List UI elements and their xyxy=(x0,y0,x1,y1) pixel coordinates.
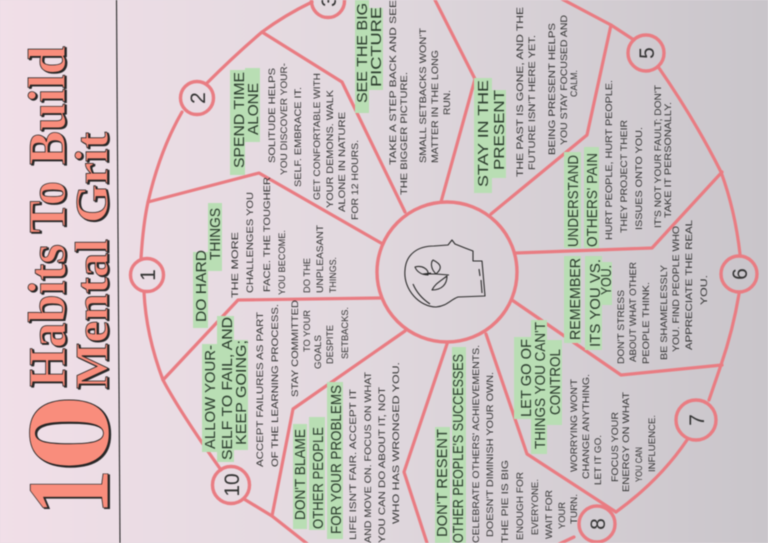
panel: habit 7 let go of things you can't control xyxy=(514,320,658,492)
panel: habit 10 allow yourself to fail: SETBACKS. xyxy=(340,307,351,359)
panel: habit 6 remember it's you vs you: DON'T STRESS xyxy=(616,290,627,364)
node 1 xyxy=(130,258,164,292)
panel: habit 6 remember it's you vs you: YOU. xyxy=(599,265,615,295)
panel: habit 7 let go of things you can't control: ENERGY ON WHAT xyxy=(621,392,632,492)
title: Habits xyxy=(20,245,78,388)
panel: habit 7 let go of things you can't control: LET GO OF xyxy=(519,339,535,417)
panel: habit 2 spend time alone: ALONE xyxy=(246,83,262,135)
panel: habit 9 don't blame other people: LIFE ISN'T FAIR. ACCEPT IT xyxy=(348,389,359,540)
panel: habit 4 stay in the present: CALM. xyxy=(569,70,580,97)
node 6: 6 xyxy=(729,268,752,280)
panel: habit 6 remember it's you vs you xyxy=(564,220,710,364)
panel: habit 3 see the big picture: SMALL SETBACKS WON'T xyxy=(418,28,429,163)
panel: habit 4 stay in the present: PRESENT xyxy=(492,90,508,170)
panel: habit 10 allow yourself to fail: OF THE LEARNING PROCESS. xyxy=(270,304,281,467)
panel: habit 8 don't resent other people's successes xyxy=(435,345,580,543)
panel: habit 2 spend time alone: YOU DISCOVER YOUR- xyxy=(279,63,290,175)
panel: habit 2 spend time alone: YOUR DEMONS. WALK xyxy=(325,89,336,208)
panel: habit 8 don't resent other people's successes: DON'T RESENT xyxy=(435,429,451,537)
title: 1 xyxy=(3,469,134,515)
title: 0 xyxy=(3,394,134,472)
panel: habit 7 let go of things you can't control: FOCUS YOUR xyxy=(610,412,621,482)
panel: habit 7 let go of things you can't control: CHANGE ANYTHING. xyxy=(581,374,592,479)
panel: habit 9 don't blame other people: DON'T BLAME xyxy=(293,429,309,520)
panel: habit 1 do hard things: THINGS xyxy=(208,208,224,260)
panel: habit 4 stay in the present: STAY IN THE xyxy=(476,80,492,187)
panel: habit 5 understand others' pain xyxy=(564,80,674,248)
panel: habit 2 spend time alone: SPEND TIME xyxy=(232,72,248,168)
panel: habit 3 see the big picture: THE BIGGER PICTURE. xyxy=(399,72,410,195)
title: Habits xyxy=(19,244,77,387)
panel: habit 10 allow yourself to fail: KEEP GOING; xyxy=(234,340,250,445)
panel: habit 5 understand others' pain: ISSUES ONTO YOU. xyxy=(634,127,645,230)
panel: habit 10 allow yourself to fail: ALLOW YOUR- xyxy=(203,345,219,449)
panel: habit 3 see the big picture: PICTURE xyxy=(369,7,385,87)
node 1: 1 xyxy=(137,269,160,281)
panel: habit 7 let go of things you can't control: INFLUENCE. xyxy=(647,415,658,472)
panel: habit 8 don't resent other people's successes: WAIT FOR xyxy=(544,490,555,539)
panel: habit 1 do hard things: DO THE xyxy=(302,258,313,293)
icon: head with sprout xyxy=(405,240,485,307)
title: 0 xyxy=(4,395,136,473)
title: 1 xyxy=(4,470,136,516)
panel: habit 10 allow yourself to fail xyxy=(202,300,351,467)
panel: habit 1 do hard things xyxy=(193,177,339,328)
panel: habit 3 see the big picture: MATTER IN THE LONG xyxy=(430,50,441,163)
node 6 xyxy=(721,256,757,292)
title xyxy=(3,46,136,516)
panel: habit 8 don't resent other people's successes: EVERYONE. xyxy=(530,479,541,535)
panel: habit 5 understand others' pain: IT'S NOT YOUR FAULT; DON'T xyxy=(653,85,664,228)
panel: habit 5 understand others' pain: TAKE IT PERSONALLY. xyxy=(663,102,674,218)
panel: habit 4 stay in the present: BEING PRESENT HELPS xyxy=(547,23,558,155)
panel: habit 2 spend time alone xyxy=(230,63,361,220)
panel: habit 2 spend time alone: ALONE IN NATURE xyxy=(337,112,348,212)
node 7 xyxy=(676,400,716,440)
panel: habit 5 understand others' pain: OTHERS' PAIN xyxy=(585,153,601,247)
node 2: 2 xyxy=(187,92,210,104)
panel: habit 3 see the big picture: TAKE A STEP BACK AND SEE xyxy=(388,0,399,165)
panel: habit 9 don't blame other people: WHO HAS WRONGED YOU. xyxy=(391,362,402,524)
panel: habit 8 don't resent other people's successes: OTHER PEOPLE'S SUCCESSES xyxy=(451,354,467,543)
title: Grit xyxy=(66,132,118,223)
panel: habit 1 do hard things: YOU BECOME. xyxy=(277,230,288,295)
title: Mental xyxy=(68,240,120,390)
panel: habit 6 remember it's you vs you: APPRECIATE THE REAL xyxy=(684,220,695,350)
panel: habit 10 allow yourself to fail: ACCEPT FAILURES AS PART xyxy=(255,312,266,467)
panel: habit 1 do hard things: FACE. THE TOUGHER xyxy=(262,177,273,292)
panel: habit 10 allow yourself to fail: GOALS xyxy=(313,335,324,369)
panel: habit 8 don't resent other people's successes: DOESN'T DIMINISH YOUR OWN. xyxy=(485,372,496,537)
panel: habit 6 remember it's you vs you: ABOUT WHAT OTHER xyxy=(628,262,639,362)
title: To xyxy=(19,181,77,233)
title: Mental xyxy=(66,239,118,389)
panel: habit 8 don't resent other people's successes: TURN. xyxy=(569,494,580,524)
panel: habit 7 let go of things you can't control: THINGS YOU CAN'T xyxy=(533,322,549,449)
panel: habit 6 remember it's you vs you: ITS YOU VS. xyxy=(588,259,604,347)
panel: habit 8 don't resent other people's successes: CELEBRATE OTHERS' ACHIEVEMENTS. xyxy=(471,345,482,543)
panel: habit 2 spend time alone: GET CONFORTABLE WITH xyxy=(312,73,323,200)
panel: habit 5 understand others' pain: UNDERSTAND xyxy=(566,155,582,247)
panel: habit 8 don't resent other people's successes: YOUR xyxy=(557,502,568,529)
node 10 xyxy=(212,466,250,504)
panel: habit 4 stay in the present: YOU STAY FOCUSED AND xyxy=(559,15,570,145)
title: Grit xyxy=(68,133,120,224)
node 8 xyxy=(579,506,615,542)
panel: habit 6 remember it's you vs you: REMEMBER xyxy=(568,258,584,340)
panel: habit 2 spend time alone: FOR 12 HOURS. xyxy=(350,140,361,220)
node 2 xyxy=(180,82,214,114)
panel: habit 1 do hard things: DO HARD xyxy=(194,250,210,322)
panel: habit 7 let go of things you can't control: WORRYING WON'T xyxy=(569,379,580,472)
panel: habit 9 don't blame other people: YOU CAN DO ABOUT IT, NOT xyxy=(377,387,388,543)
title: Build xyxy=(19,46,77,165)
node 7: 7 xyxy=(686,414,709,426)
node 8: 8 xyxy=(587,518,610,530)
node 10: 10 xyxy=(221,473,244,497)
panel: habit 7 let go of things you can't control: CONTROL xyxy=(548,349,564,415)
node 5 xyxy=(628,35,664,71)
panel: habit 5 understand others' pain: HURT PEOPLE, HURT PEOPLE. xyxy=(604,80,615,240)
spokes dividing the segments xyxy=(148,0,722,543)
panel: habit 6 remember it's you vs you: BE SHAMELESSLY xyxy=(659,264,670,360)
panel: habit 3 see the big picture: RUN. xyxy=(442,90,453,115)
panel: habit 1 do hard things: CHALLENGES YOU xyxy=(245,192,256,293)
panel: habit 4 stay in the present: THE PAST IS GONE, AND THE xyxy=(515,7,526,177)
panel: habit 6 remember it's you vs you: YOU. xyxy=(699,275,710,305)
panel: habit 7 let go of things you can't control: YOU CAN xyxy=(634,447,645,482)
panel: habit 1 do hard things: UNPLEASANT xyxy=(315,225,326,293)
panel: habit 1 do hard things: THINGS. xyxy=(328,257,339,293)
central hub with head icon xyxy=(377,202,517,342)
panel: habit 10 allow yourself to fail: DESPITE xyxy=(325,325,336,364)
panel: habit 2 spend time alone: SELF. EMBRACE IT. xyxy=(293,87,304,187)
panel: habit 10 allow yourself to fail: STAY COMMITTED xyxy=(290,300,301,397)
panel: habit 3 see the big picture xyxy=(355,0,453,195)
outer ring arcs xyxy=(141,0,740,543)
panel: habit 6 remember it's you vs you: YOU. FIND PEOPLE WHO xyxy=(671,226,682,352)
title: Build xyxy=(20,47,78,166)
node 3 xyxy=(312,0,344,18)
panel: habit 9 don't blame other people: FOR YOUR PROBLEMS xyxy=(329,385,345,534)
panel: habit 2 spend time alone: SOLITUDE HELPS xyxy=(267,68,278,163)
panel: habit 5 understand others' pain: THEY PROJECT THEIR xyxy=(619,120,630,233)
panel: habit 4 stay in the present: FUTURE ISN'T HERE YET. xyxy=(527,35,538,170)
panel: habit 6 remember it's you vs you: PEOPLE THINK. xyxy=(641,282,652,364)
panel: habit 8 don't resent other people's successes: THE PIE IS BIG xyxy=(500,460,511,543)
panel: habit 3 see the big picture: SEE THE BIG xyxy=(355,3,371,103)
panel: habit 9 don't blame other people: AND MOVE ON. FOCUS ON WHAT xyxy=(363,372,374,543)
title: To xyxy=(20,182,78,234)
panel: habit 10 allow yourself to fail: TO YOUR xyxy=(302,310,313,352)
panel: habit 9 don't blame other people: OTHER PEOPLE xyxy=(311,427,327,529)
node 5: 5 xyxy=(636,47,659,59)
panel: habit 4 stay in the present xyxy=(474,7,580,193)
panel: habit 8 don't resent other people's successes: ENOUGH FOR xyxy=(515,472,526,540)
panel: habit 1 do hard things: THE MORE xyxy=(230,232,241,298)
panel: habit 10 allow yourself to fail: SELF TO FAIL, AND xyxy=(220,317,236,460)
panel: habit 9 don't blame other people xyxy=(293,362,402,543)
panel: habit 7 let go of things you can't control: LET IT GO. xyxy=(593,435,604,485)
